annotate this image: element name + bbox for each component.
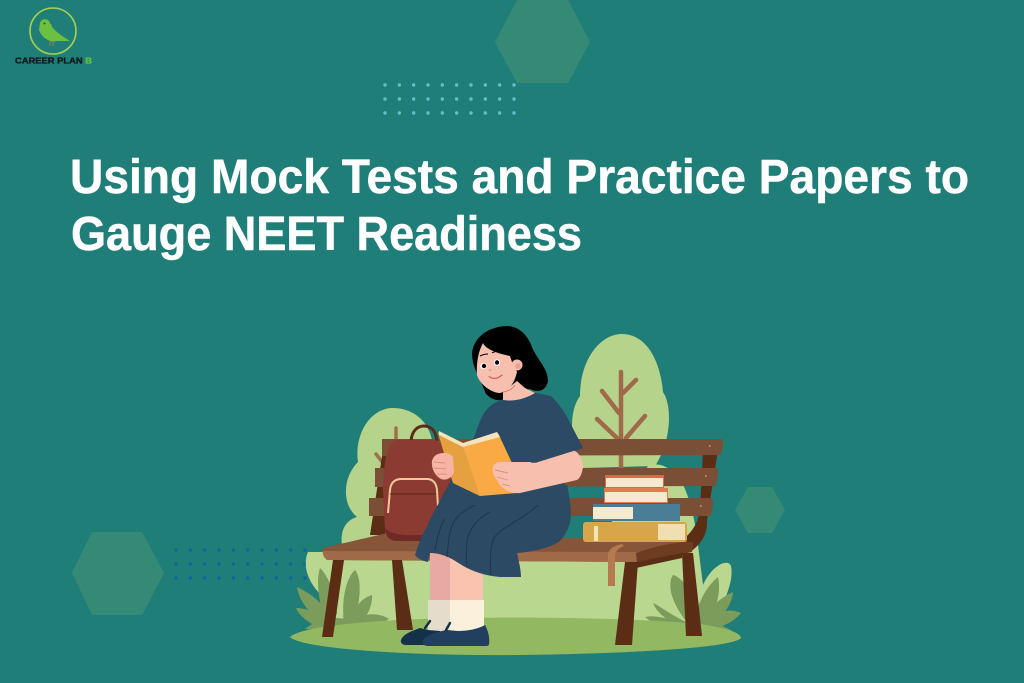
- logo: Career Plan B: [15, 8, 92, 66]
- title: [70, 151, 969, 261]
- legs: [430, 550, 450, 602]
- nose: [489, 369, 491, 371]
- backpack: [383, 426, 462, 541]
- right tree trunk: [597, 372, 645, 470]
- hexagon: right: [735, 487, 785, 533]
- left tree branches: [376, 428, 396, 467]
- top book: [605, 475, 664, 488]
- top and torso: [428, 393, 583, 523]
- student: [401, 326, 583, 646]
- shoes: [401, 628, 440, 645]
- bench back posts: [370, 450, 395, 535]
- backpack pocket: [388, 479, 438, 513]
- eyes: [480, 359, 500, 369]
- bird eye: [44, 22, 46, 24]
- back hair: [472, 326, 548, 400]
- near hand fingers: [495, 470, 510, 486]
- right tree: [572, 334, 669, 468]
- far hand fingers: [434, 462, 447, 474]
- smile: [489, 375, 502, 378]
- title: Gauge NEET Readiness: [71, 208, 582, 261]
- teal book: [593, 504, 680, 521]
- arm and near hand: [493, 450, 583, 493]
- bench seat: [323, 534, 693, 562]
- lush green backdrop: [306, 464, 732, 630]
- dot grid: bottom: [176, 550, 310, 578]
- logo wordmark: CAREER PLAN B: [15, 56, 92, 66]
- neck: [503, 381, 535, 401]
- bird legs: [50, 41, 53, 46]
- title: Using Mock Tests and Practice Papers to: [70, 151, 969, 204]
- bench slats: [382, 439, 723, 456]
- ear: [512, 360, 522, 370]
- hexagon: top: [495, 0, 590, 83]
- right plant: [645, 575, 741, 634]
- left tree: [342, 408, 445, 545]
- backpack side strap: [453, 487, 457, 501]
- shoe straps: [425, 621, 450, 630]
- logo ring: [30, 8, 76, 54]
- bench screws: [700, 446, 710, 506]
- neck line: [503, 385, 515, 392]
- inner ear: [515, 363, 521, 369]
- hexagon: left: [72, 532, 164, 615]
- illustration: student reading on a park bench: [290, 326, 741, 655]
- bird beak: [49, 23, 52, 28]
- bench legs: [322, 560, 344, 637]
- sleeve: [530, 410, 583, 463]
- icon: bird: [39, 19, 70, 41]
- bench: [322, 439, 723, 645]
- open book: [438, 431, 517, 496]
- skirt: [415, 485, 571, 577]
- dot grid: top: [385, 85, 520, 113]
- middle book: [604, 488, 668, 503]
- socks: [428, 600, 450, 632]
- bottom book: [583, 522, 687, 542]
- backpack body: [383, 440, 462, 541]
- bookmark strap: [608, 544, 624, 586]
- skirt pleats: [435, 505, 538, 575]
- far hand: [432, 453, 454, 480]
- backpack handle: [411, 426, 437, 441]
- ground: [290, 618, 741, 655]
- brows: [480, 351, 502, 356]
- face: [477, 343, 517, 393]
- left plant: [296, 568, 389, 630]
- stack of books: [583, 475, 687, 586]
